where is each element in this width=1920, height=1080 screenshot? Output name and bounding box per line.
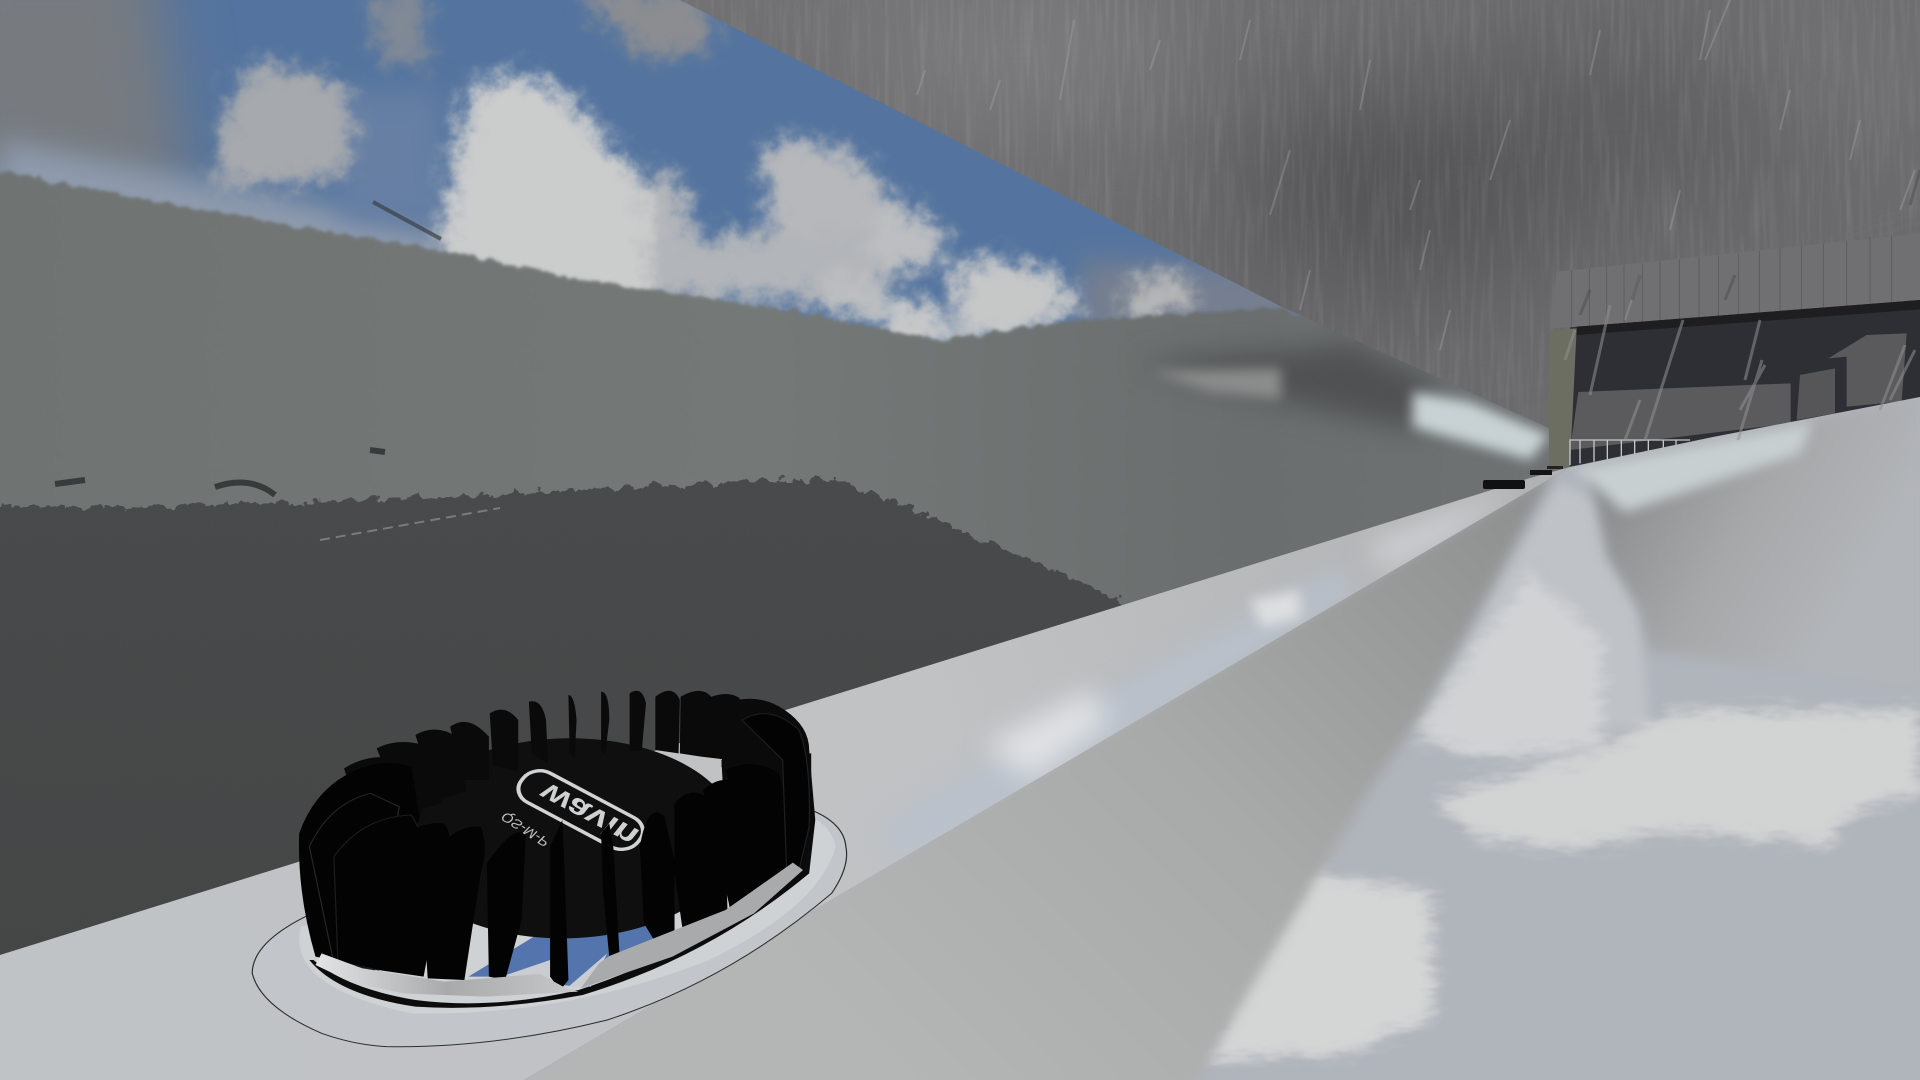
gutter reflections [1250, 590, 1300, 628]
concrete pillar [1546, 328, 1577, 468]
back fins [344, 691, 815, 910]
inner house [1828, 333, 1907, 407]
band highlight [1150, 368, 1281, 400]
base plate [391, 734, 742, 943]
roof drain [252, 691, 847, 1047]
wavin logo: wavin [531, 777, 645, 852]
rain streaks [917, 0, 1920, 440]
grey region beside roof edge [500, 470, 1555, 1080]
tip highlight [1413, 392, 1549, 460]
inner volume [1797, 368, 1835, 420]
model label: QS-M-P [497, 810, 553, 850]
main roof surface [524, 397, 1920, 1080]
fan cloud reflection [1414, 570, 1602, 760]
front fins [299, 714, 809, 990]
flange inner highlight [299, 817, 836, 1014]
dark interior of building [1570, 300, 1920, 467]
roof fascia line [1577, 300, 1920, 335]
distant outlet grates [1483, 466, 1563, 489]
dark wedge in band [1138, 343, 1436, 430]
wavin logo [511, 765, 650, 855]
gutter strip [0, 460, 1600, 1080]
upper right roof area [1588, 398, 1916, 660]
lower glazed panel [1570, 383, 1791, 450]
membrane flange [252, 810, 847, 1047]
fan reflection near drain point [1438, 486, 1648, 729]
lower cloud reflection [1205, 874, 1435, 1062]
white membrane near opening [501, 953, 607, 988]
dark rim beneath [309, 820, 815, 1008]
flashing strip left [315, 953, 579, 997]
sky seen through drain [468, 913, 664, 987]
blemishes along band edge [55, 450, 385, 495]
large cloud reflection [1435, 710, 1920, 851]
grey band [0, 170, 1549, 570]
fan reflection upper [1574, 422, 1812, 512]
railing [1569, 440, 1690, 465]
blue reflection along roof edge [966, 574, 1350, 804]
building behind the roof [1546, 233, 1920, 468]
dark lower reflection [0, 478, 1140, 980]
clouds [218, 0, 1195, 345]
rain wall background [886, 0, 1920, 476]
reflective wall [0, 0, 1560, 980]
sky reflection [0, 0, 1300, 360]
building facade cladding [1550, 233, 1920, 328]
flashing strip right [581, 863, 803, 988]
